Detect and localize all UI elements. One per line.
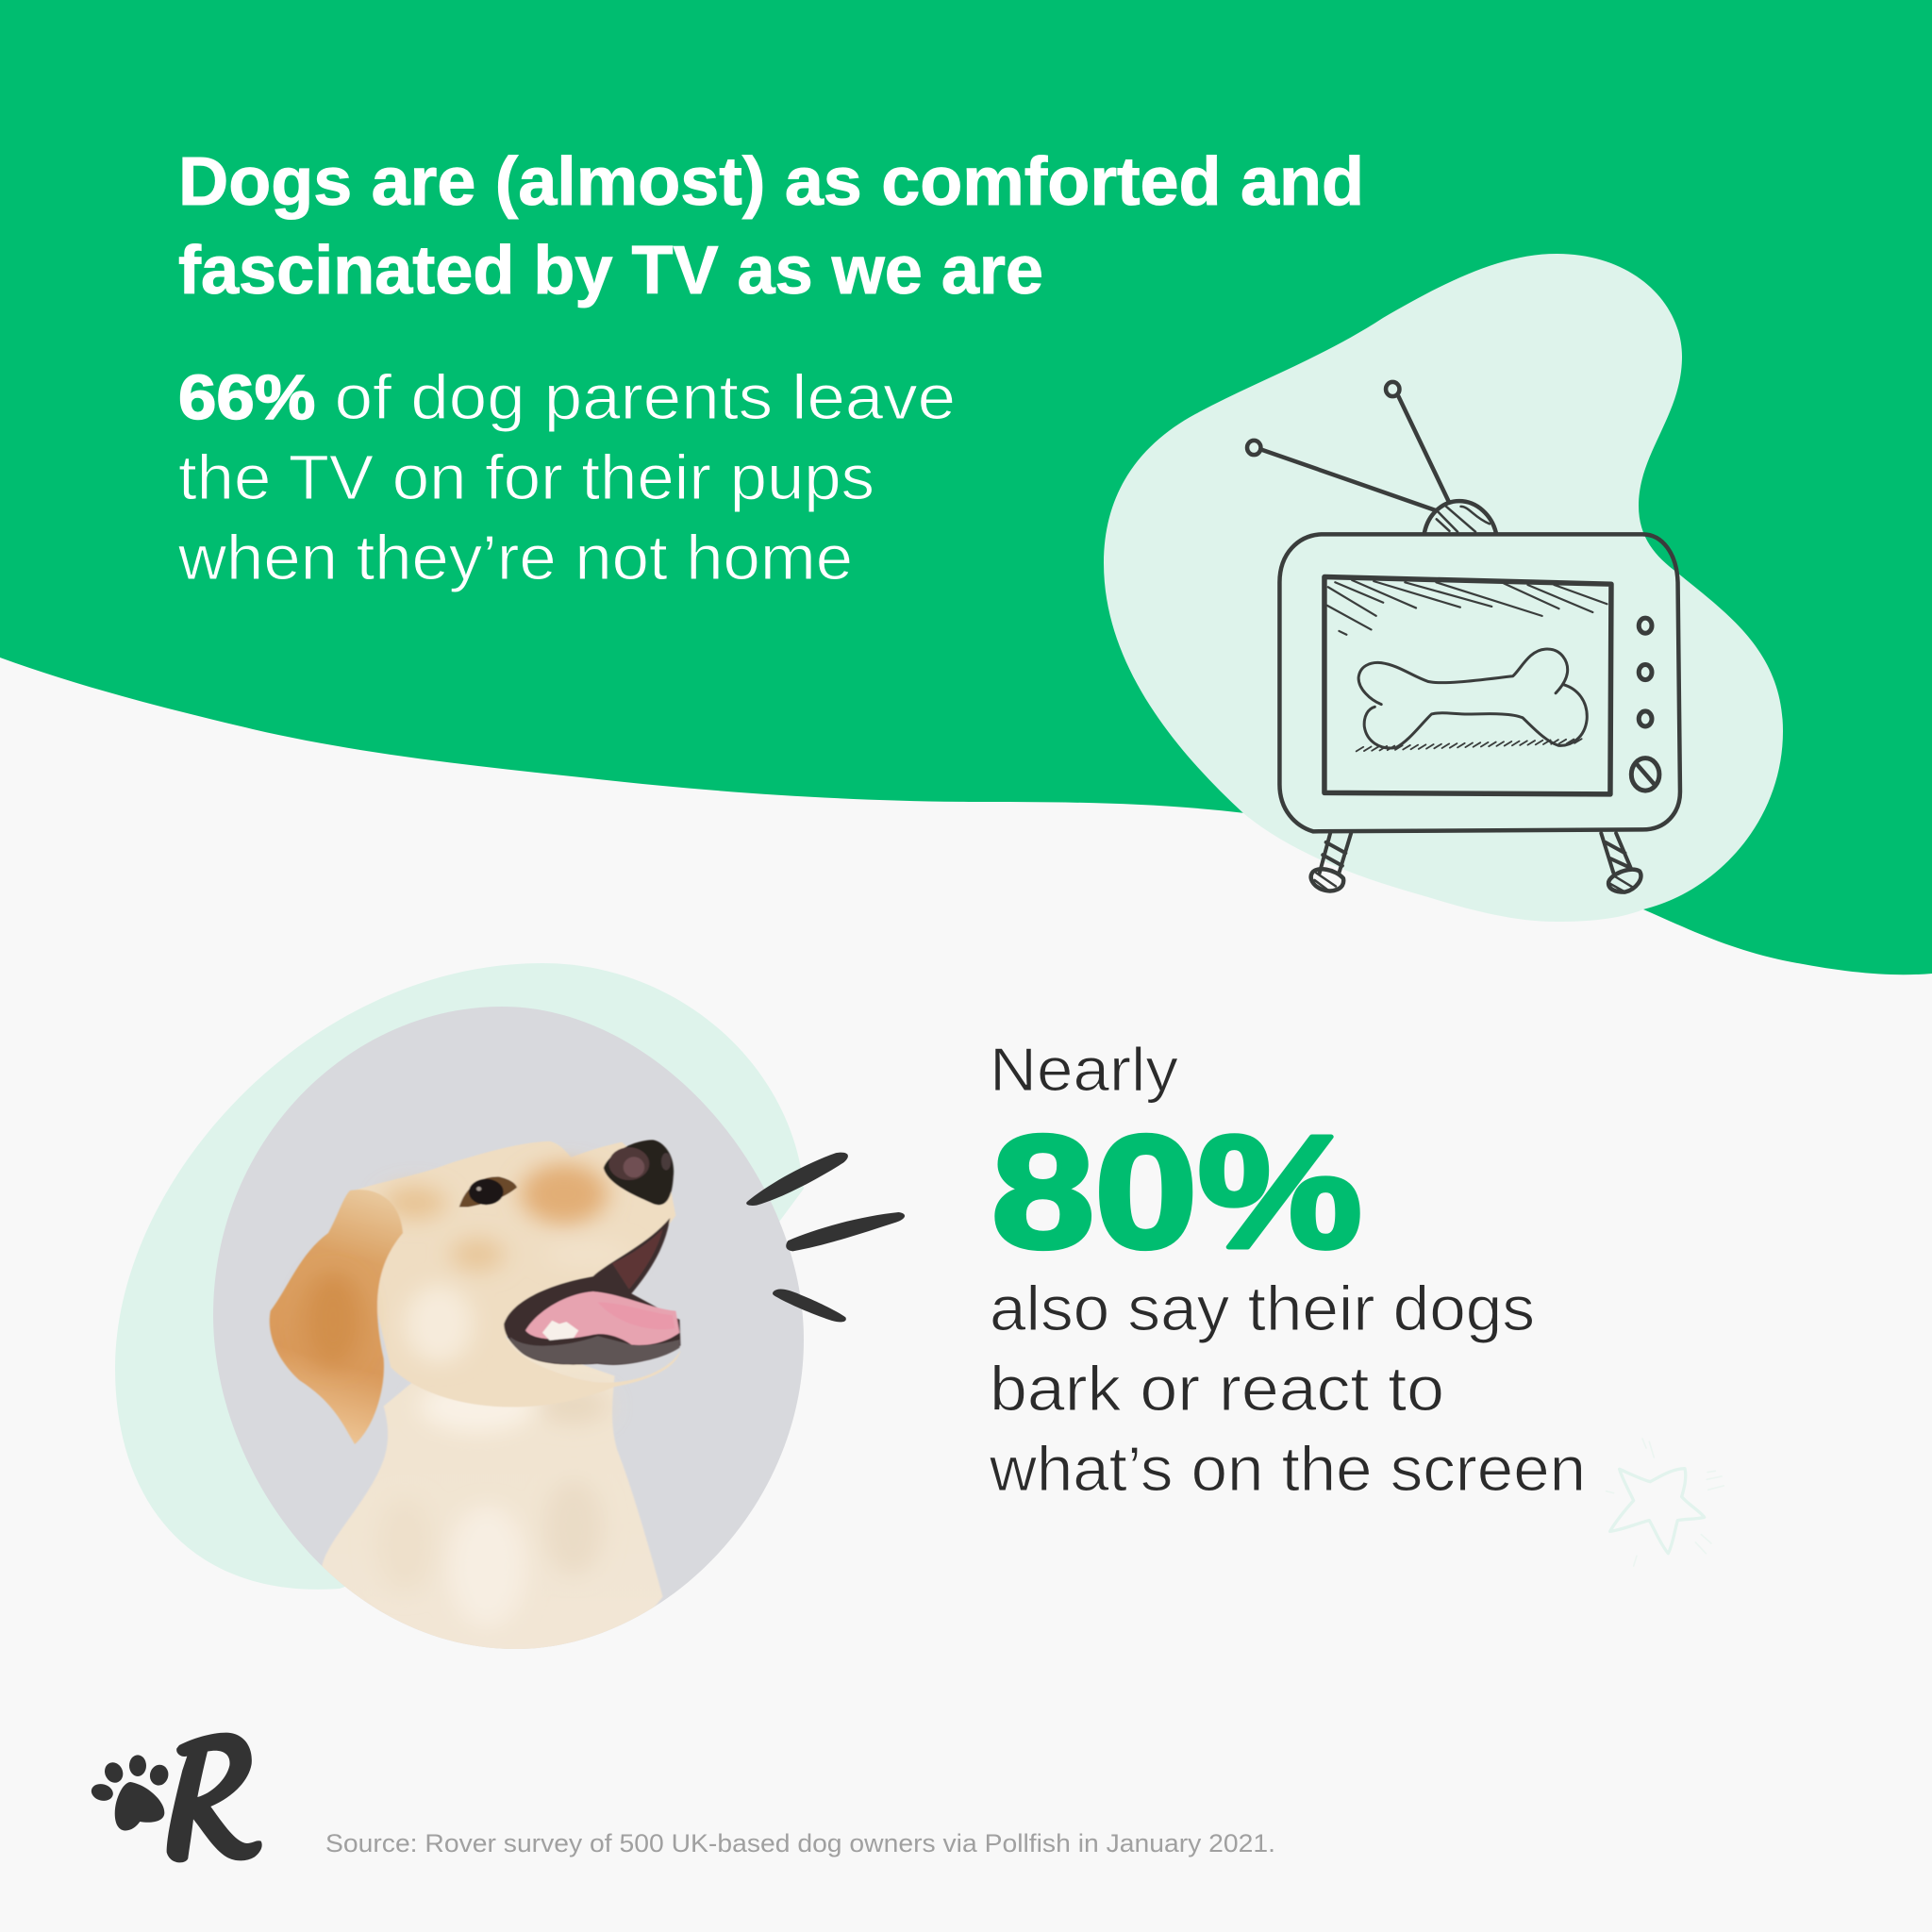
stat text: 80%: what’s on the screen xyxy=(989,1434,1586,1505)
teeth xyxy=(542,1321,578,1341)
stat text: 80% xyxy=(989,1035,1586,1505)
TV screen xyxy=(1324,577,1611,794)
bone shadow hatching xyxy=(1357,739,1582,751)
dog illustration xyxy=(270,1140,680,1671)
title: Dogs are (almost) as comforted and xyxy=(178,144,1364,220)
left leg xyxy=(1311,833,1351,891)
right leg xyxy=(1601,833,1641,892)
tongue xyxy=(525,1291,679,1345)
stat text: 66%: the TV on for their pups xyxy=(178,442,874,513)
chest xyxy=(321,1328,663,1671)
tongue highlight xyxy=(598,1302,675,1329)
stat text: 80%: 80% xyxy=(991,1103,1362,1282)
icon: television with bone xyxy=(1247,382,1680,892)
head xyxy=(350,1141,680,1407)
stat text: 66%: 66% of dog parents leave xyxy=(178,362,956,433)
stat text: 80%: Nearly xyxy=(990,1035,1179,1104)
title: fascinated by TV as we are xyxy=(178,233,1043,308)
bark lines xyxy=(746,1153,905,1322)
open mouth xyxy=(504,1218,680,1365)
mint blob behind dog xyxy=(115,963,804,1590)
stat text: 66%: when they’re not home xyxy=(177,523,853,593)
dog photo circle xyxy=(213,1007,804,1649)
lower lip xyxy=(510,1336,679,1364)
eye xyxy=(459,1176,517,1208)
antennas xyxy=(1247,382,1448,510)
ear fur xyxy=(304,1272,362,1367)
photo background xyxy=(213,1007,804,1607)
screen glare hatching xyxy=(1327,580,1607,635)
chest shading xyxy=(392,1392,602,1621)
nose xyxy=(604,1140,674,1205)
green wave header xyxy=(0,0,1932,974)
stat text: 66% xyxy=(177,362,956,593)
title xyxy=(178,144,1364,308)
stat text: 80%: bark or react to xyxy=(990,1354,1444,1424)
stat text: 80%: also say their dogs xyxy=(990,1274,1535,1344)
icon: star doodle xyxy=(1607,1439,1724,1566)
R mark xyxy=(167,1733,262,1862)
bone xyxy=(1358,649,1587,748)
mint blob behind TV xyxy=(1104,254,1783,922)
TV body xyxy=(1279,534,1680,831)
knobs xyxy=(1631,618,1659,791)
source note: Source: Rover survey of 500 UK-based dog owners via Pollfish in January 2021. xyxy=(325,1829,1275,1857)
logo: paw and R xyxy=(90,1733,262,1862)
antenna base xyxy=(1424,501,1496,532)
head shading xyxy=(384,1164,631,1363)
ear xyxy=(270,1190,403,1444)
paw xyxy=(90,1755,171,1830)
